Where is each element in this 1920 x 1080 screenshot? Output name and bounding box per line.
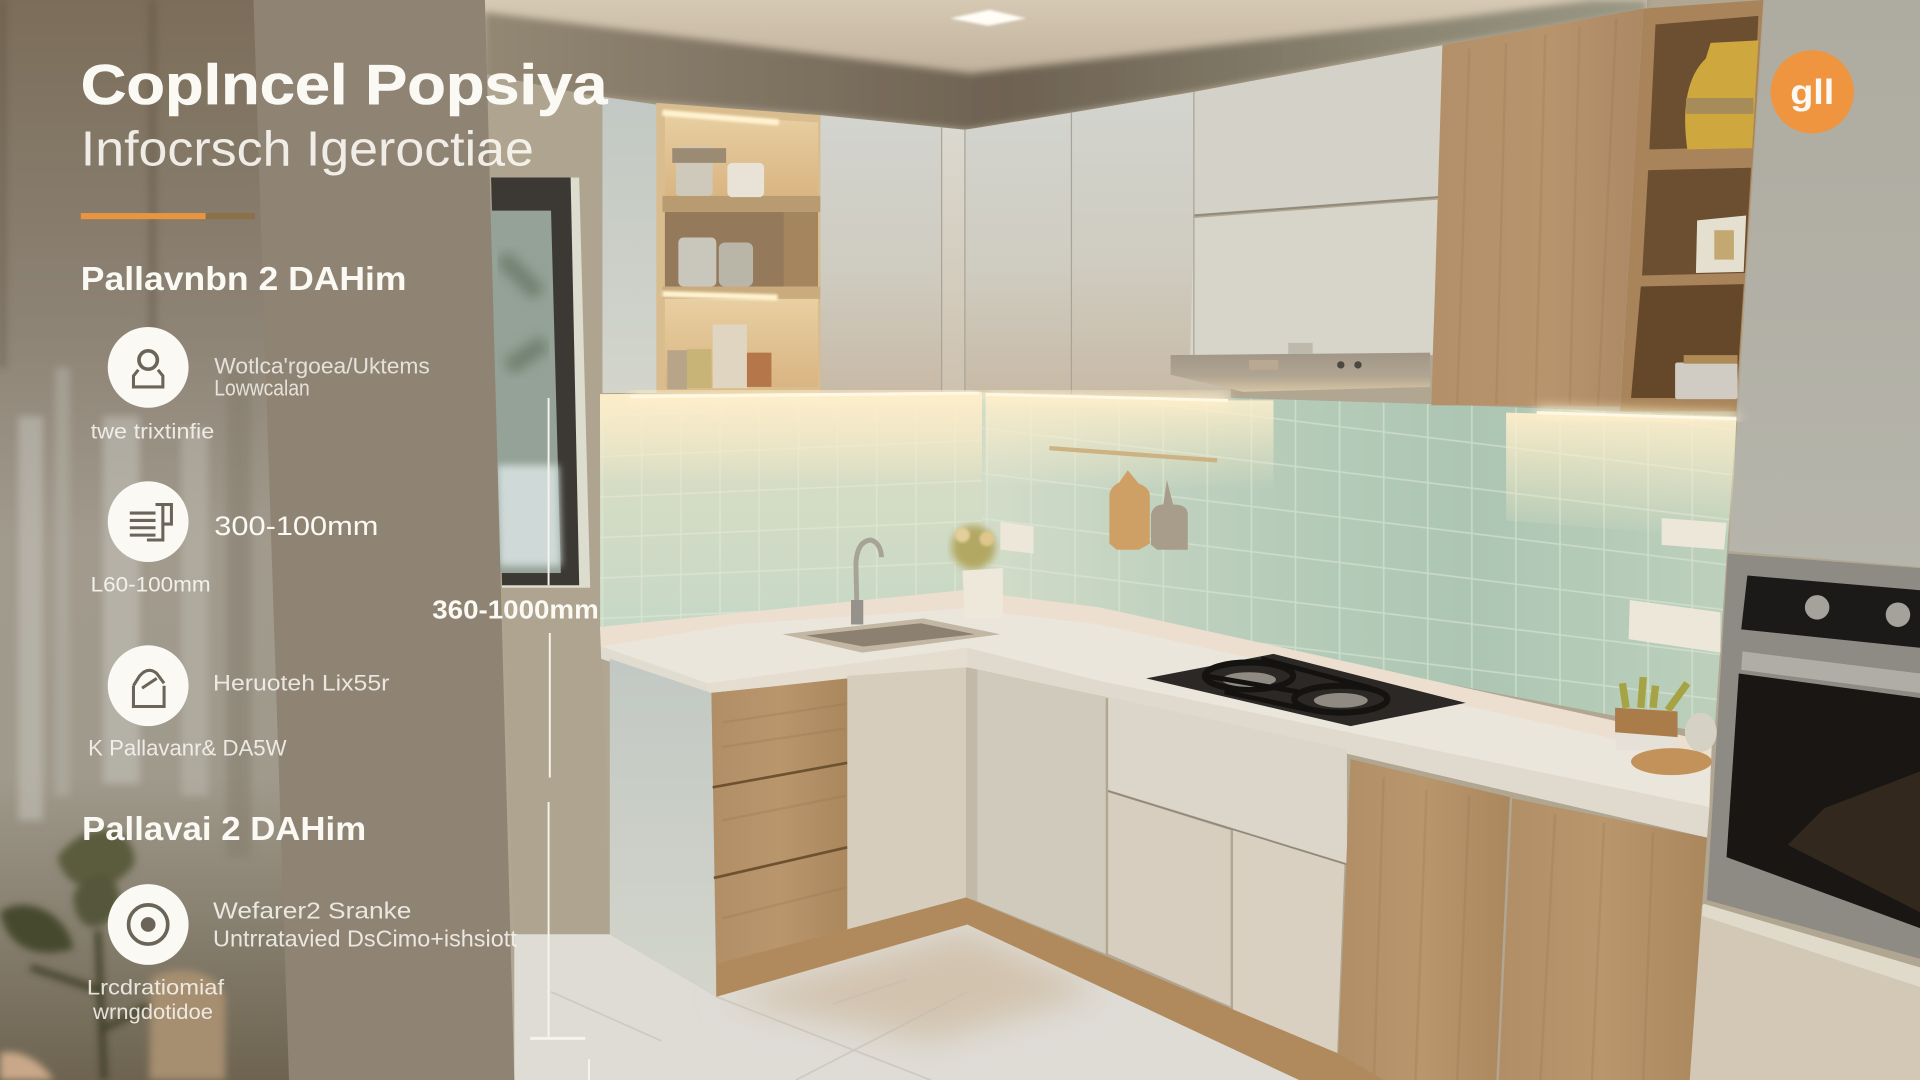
item caption 4 (87, 976, 224, 1024)
flower vase (951, 525, 1003, 618)
wall sockets (1000, 518, 1727, 653)
subtitle: Infocrsch Igeroctiae (81, 122, 534, 176)
item label 4 (213, 897, 517, 952)
wall band (484, 0, 1647, 130)
backsplash left wall (600, 392, 982, 631)
countertop with upstand (600, 590, 1712, 838)
icon: person badge (108, 327, 189, 408)
lower cabinets (610, 659, 1707, 1080)
left curtain (0, 0, 300, 1080)
window (491, 178, 590, 588)
item caption 4: Lrcdratiomiaf (87, 976, 224, 999)
section heading 1: Pallavnbn 2 DAHim (81, 261, 407, 298)
sink and faucet (782, 540, 1000, 653)
section heading 2: Pallavai 2 DAHim (82, 811, 366, 848)
item caption 4: wrngdotidoe (92, 1001, 213, 1024)
item value 2: 300-100mm (214, 511, 378, 541)
wall pillar (253, 0, 514, 1080)
icon: stacked panels (108, 481, 189, 562)
open right shelves (1620, 0, 1763, 411)
range hood (1171, 343, 1430, 392)
plant, pot and cushion (0, 829, 225, 1080)
item label 1: Lowwcalan (214, 376, 310, 401)
wood upper cabinet (1431, 9, 1643, 407)
upper white cabinets (820, 45, 1442, 399)
potted plant, jar and plate (1615, 677, 1717, 775)
logo badge (1771, 50, 1854, 133)
logo badge: gll (1790, 72, 1834, 112)
dimension label: 360-1000mm (432, 596, 599, 624)
ceiling light (950, 10, 1026, 26)
open shelf cabinet (602, 97, 820, 393)
floor warm reflection (722, 931, 1102, 1041)
item caption 1: twe trixtinfie (91, 420, 214, 443)
icon: concentric circle (108, 884, 189, 965)
curtain folds (0, 0, 251, 857)
item label 4: Untrratavied DsCimo+ishsiott (213, 926, 517, 952)
dimension line (530, 398, 589, 1080)
accent divider (81, 213, 255, 219)
item caption 3: K Pallavanr& DA5W (88, 736, 287, 761)
ceiling (484, 0, 1647, 98)
backsplash right wall (982, 392, 1736, 735)
LED glow on tiles (600, 392, 1736, 539)
side wall (484, 73, 610, 943)
title: Coplncel Popsiya (81, 53, 608, 116)
item caption 2: L60-100mm (91, 573, 211, 596)
gas cooktop (1146, 654, 1466, 726)
item label 3: Heruoteh Lix55r (213, 671, 389, 696)
item label 1 (214, 353, 430, 401)
item label 1: Wotlca'rgoea/Uktems (214, 353, 430, 378)
oven (1690, 553, 1920, 1080)
floor (514, 924, 1299, 1080)
item label 4: Wefarer2 Sranke (213, 897, 411, 923)
under-cabinet LED strips (631, 393, 1736, 419)
icon: box with arrow (108, 645, 189, 726)
rail and boards (1049, 448, 1217, 550)
right tall panel (1729, 0, 1920, 567)
